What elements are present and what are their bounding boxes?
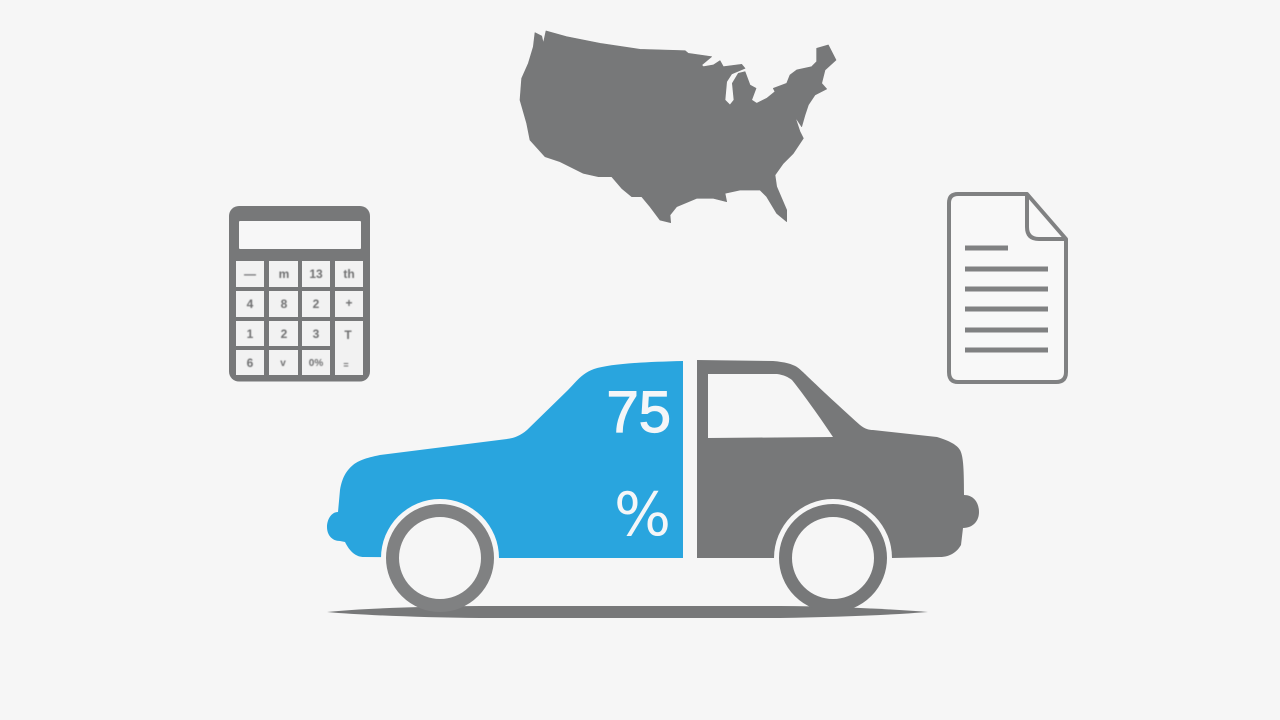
- calculator key labels: [244, 267, 355, 370]
- calculator key labels: T: [344, 328, 352, 342]
- calculator key labels: 6: [247, 356, 254, 370]
- calculator key labels: 8: [281, 297, 288, 311]
- icon: document: [949, 194, 1066, 382]
- calculator key labels: 3: [313, 327, 320, 341]
- car body: blue 75 percent section: [327, 361, 683, 617]
- document folded corner: [1027, 194, 1066, 239]
- icon: calculator: [229, 206, 370, 382]
- calculator keys: [236, 261, 363, 375]
- calculator key labels: 2: [313, 297, 320, 311]
- car body: gray remaining section: [697, 360, 979, 617]
- calculator key labels: 13: [309, 267, 323, 281]
- label: 75: 75: [606, 380, 671, 445]
- calculator key labels: +: [345, 296, 353, 310]
- calculator key labels: 1: [247, 327, 254, 341]
- calculator key labels: v: [280, 358, 286, 369]
- calculator key labels: —: [244, 267, 256, 281]
- rear wheel: [786, 510, 880, 606]
- document text lines: [965, 248, 1048, 350]
- ground shadow: [327, 606, 928, 618]
- calculator key labels: m: [279, 267, 289, 281]
- calculator key labels: 0%: [309, 358, 323, 369]
- car with 75% filled: [327, 360, 979, 618]
- front wheel: [392, 510, 488, 606]
- calculator key labels: 2: [281, 327, 288, 341]
- label: percent sign: %: [614, 480, 671, 550]
- icon: map of the United States: [520, 31, 836, 223]
- calculator key labels: th: [343, 267, 355, 281]
- calculator key labels: 4: [247, 297, 254, 311]
- calculator display: [239, 221, 361, 249]
- calculator key labels: =: [343, 360, 349, 370]
